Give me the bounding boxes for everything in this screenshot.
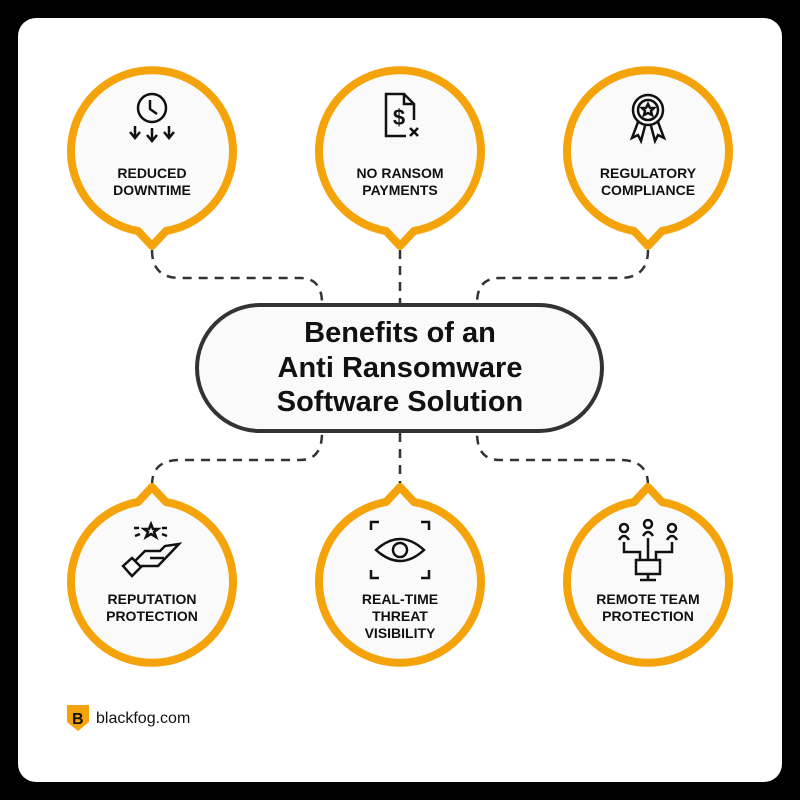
panel: reduced downtime (71, 70, 233, 246)
panel: real-time threat visibility: REAL-TIME (362, 591, 438, 607)
panel: regulatory compliance: REGULATORY (600, 165, 697, 181)
panel: remote team protection: REMOTE TEAM (596, 591, 700, 607)
panel: no ransom payments (319, 70, 481, 246)
panel: reduced downtime: REDUCED (117, 165, 187, 181)
icon: award badge (632, 95, 664, 141)
panel: no ransom payments: PAYMENTS (362, 182, 438, 198)
icon: network users (619, 520, 677, 580)
connectors (152, 250, 648, 485)
panel: reduced downtime: DOWNTIME (113, 182, 191, 198)
icon: clock (130, 94, 174, 141)
center pill: title: Anti Ransomware (278, 352, 522, 384)
panel: real-time threat visibility: VISIBILITY (365, 625, 436, 641)
center pill: title: Benefits of an (304, 317, 496, 349)
panel: real-time threat visibility: THREAT (372, 608, 428, 624)
panel: no ransom payments: $ (393, 105, 405, 130)
panel: reputation protection: REPUTATION (108, 591, 196, 607)
logo: blackfog: blackfog.com (96, 710, 190, 727)
center pill: title (197, 305, 602, 431)
icon: dollar document (386, 94, 418, 136)
panel: reputation protection: PROTECTION (106, 608, 198, 624)
panel: remote team protection (567, 487, 729, 663)
logo: blackfog (67, 705, 190, 731)
icon: eye in frame (371, 522, 429, 578)
panel: real-time threat visibility (319, 487, 481, 663)
icon: hand with star (123, 524, 179, 576)
panel: regulatory compliance: COMPLIANCE (601, 182, 695, 198)
panel: remote team protection: PROTECTION (602, 608, 694, 624)
panel: reputation protection (71, 487, 233, 663)
logo: blackfog: B (72, 711, 84, 728)
panel: no ransom payments: NO RANSOM (356, 165, 444, 181)
panel: regulatory compliance (567, 70, 729, 246)
center pill: title: Software Solution (277, 386, 523, 418)
